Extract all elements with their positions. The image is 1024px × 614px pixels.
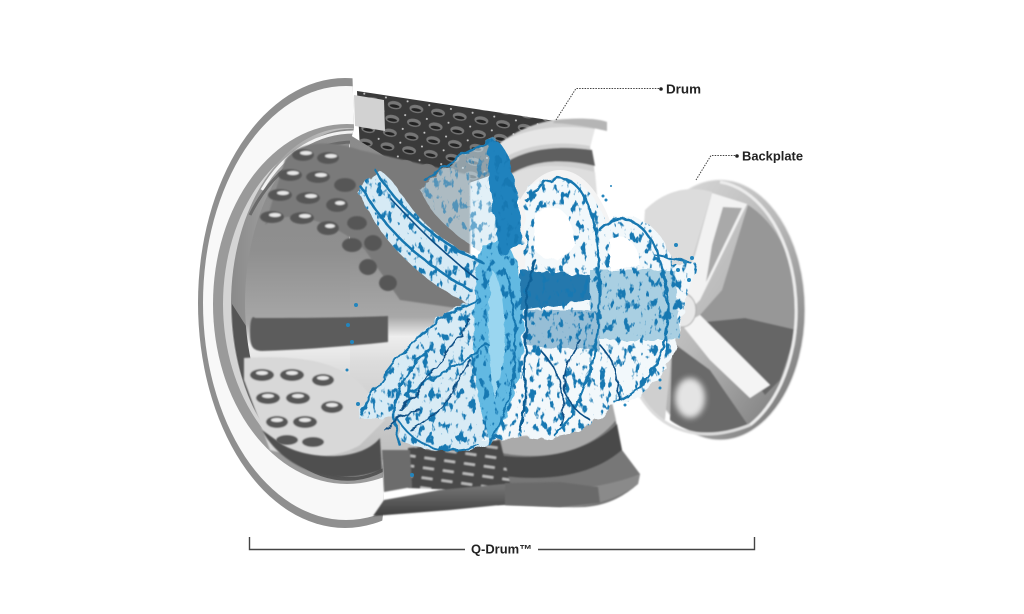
backplate white diagonal — [682, 315, 770, 398]
interior perforations — [244, 143, 470, 456]
backplate right panel — [700, 205, 798, 385]
back ring interior, behind water — [496, 170, 624, 440]
backplate hub — [668, 293, 696, 327]
interior right wall behind water — [350, 135, 470, 460]
water droplets — [346, 185, 694, 477]
label: Drum — [556, 82, 701, 120]
backplate white rib — [672, 193, 747, 320]
drum body top, perforated — [357, 91, 555, 200]
baffle — [250, 316, 388, 351]
backplate dark shadow — [705, 318, 797, 395]
label: Drum: Drum — [666, 82, 701, 96]
backplate lower sector — [670, 342, 748, 434]
water: top column — [488, 140, 522, 255]
backplate light sector — [640, 189, 712, 290]
rim inner dark lower curve — [262, 430, 382, 477]
water: left upper swoop — [360, 173, 492, 305]
water: right lobes — [480, 178, 695, 440]
backplate — [634, 180, 805, 440]
label: Backplate — [696, 150, 803, 180]
water: centre dark band — [520, 270, 590, 310]
drum front rim — [198, 78, 384, 528]
back ring top — [500, 119, 607, 200]
water splash — [358, 138, 695, 451]
drum body bottom — [373, 440, 600, 516]
water: lower left swoop — [358, 298, 490, 451]
water: translucent arc — [420, 138, 505, 250]
white block at rim cut — [354, 95, 385, 131]
bracket: Q-Drum: Q-Drum™ — [471, 542, 532, 556]
bracket: Q-Drum — [250, 537, 754, 556]
water: bright streaks and dark edges — [362, 142, 690, 451]
water: central lens — [473, 240, 524, 445]
label: Backplate: Backplate — [742, 150, 803, 164]
back ring bottom, ribbed — [497, 398, 640, 507]
